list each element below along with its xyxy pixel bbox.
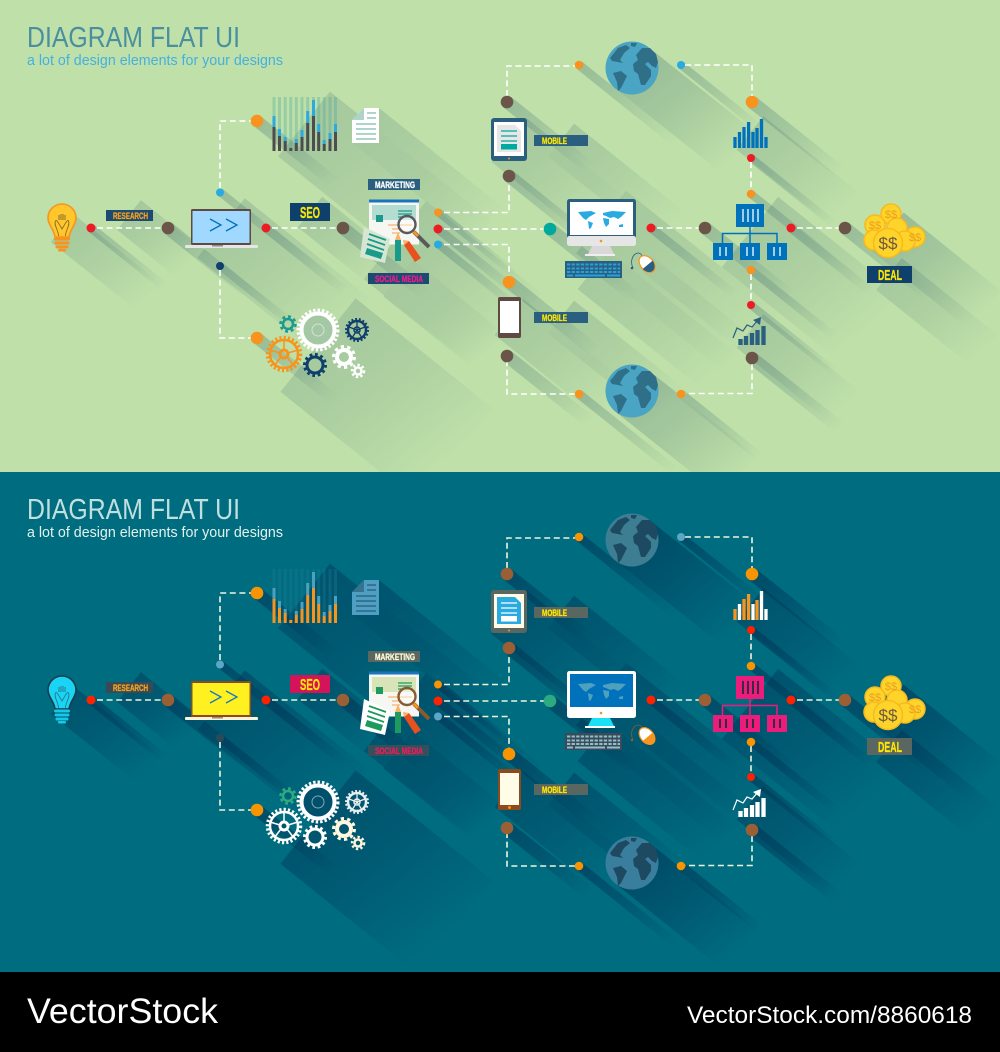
icon: globe top	[606, 42, 658, 94]
subtitle: a lot of design elements for your designs	[27, 52, 283, 69]
footer bar	[0, 972, 1000, 1052]
icon: tablet	[491, 118, 527, 161]
label: mobile bottom: MOBILE	[542, 785, 567, 795]
icon: gold coins	[864, 676, 925, 730]
subtitle: a lot of design elements for your designs	[27, 524, 283, 541]
icon: mouse	[631, 253, 658, 275]
label: marketing: MARKETING	[375, 180, 415, 190]
label: marketing	[368, 179, 420, 190]
icon: gold coins	[864, 204, 925, 258]
panel: light green diagram	[0, 0, 1000, 477]
icon: desktop monitor	[567, 671, 636, 728]
icon: document	[352, 580, 379, 615]
icon: org chart	[713, 676, 787, 732]
icon: globe bottom	[606, 836, 658, 890]
footer brand: VectorStock	[27, 992, 219, 1031]
bar chart	[274, 97, 336, 151]
label: research: RESEARCH	[113, 211, 148, 221]
label: deal	[867, 738, 912, 756]
label: marketing	[368, 651, 420, 662]
icon: gold coins: $$	[879, 234, 898, 253]
label: mobile top: MOBILE	[542, 136, 567, 146]
label: research: RESEARCH	[113, 683, 148, 693]
label: SEO: SEO	[300, 205, 320, 222]
icon: gold coins: $$	[869, 220, 881, 232]
icon: desktop monitor	[567, 199, 636, 256]
icon: gold coins: $$	[879, 706, 898, 725]
icon: mini bar chart	[735, 591, 766, 620]
label: social media: SOCIAL MEDIA	[375, 274, 423, 284]
label: SEO	[290, 675, 330, 694]
label: mobile top: MOBILE	[542, 608, 567, 618]
label: research	[106, 210, 153, 221]
icon: tablet	[491, 590, 527, 633]
icon: phone	[498, 297, 521, 338]
label: social media	[368, 273, 429, 284]
label: mobile top	[534, 135, 588, 146]
icon: gears	[268, 310, 368, 377]
long shadows	[62, 65, 985, 477]
label: mobile bottom	[534, 312, 588, 323]
title: DIAGRAM FLAT UI	[27, 494, 240, 526]
icon: gold coins: $$	[909, 232, 921, 244]
panel: teal diagram	[0, 472, 1000, 972]
long shadows	[62, 537, 985, 949]
icon: gold coins: $$	[869, 692, 881, 704]
label: SEO: SEO	[300, 677, 320, 694]
bar chart	[274, 569, 336, 623]
label: mobile top	[534, 607, 588, 618]
label: mobile bottom	[534, 784, 588, 795]
icon: marketing window and tools	[360, 200, 429, 263]
icon: globe bottom	[606, 364, 658, 418]
icon: mouse	[631, 725, 658, 747]
icon: document	[352, 108, 379, 143]
icon: marketing window and tools	[360, 672, 429, 735]
icon: keyboard	[565, 733, 622, 750]
icon: phone	[498, 769, 521, 810]
label: research	[106, 682, 153, 693]
label: deal	[867, 266, 912, 284]
label: mobile bottom: MOBILE	[542, 313, 567, 323]
icon: gold coins: $$	[885, 209, 897, 221]
icon: mini bar chart	[735, 119, 766, 148]
label: social media: SOCIAL MEDIA	[375, 746, 423, 756]
connector dots	[86, 533, 851, 870]
label: deal: DEAL	[878, 739, 902, 756]
icon: light bulb	[48, 204, 76, 252]
icon: growth chart	[733, 317, 764, 345]
icon: keyboard	[565, 261, 622, 278]
icon: growth chart	[733, 789, 764, 817]
connector dots	[86, 61, 851, 398]
icon: globe top	[606, 514, 658, 566]
icon: laptop	[185, 209, 258, 248]
icon: laptop	[185, 681, 258, 720]
icon: gold coins: $$	[909, 704, 921, 716]
dashed connectors	[97, 537, 839, 866]
footer url: VectorStock.com/8860618	[687, 1002, 972, 1029]
title: DIAGRAM FLAT UI	[27, 22, 240, 54]
icon: gold coins: $$	[885, 681, 897, 693]
icon: org chart	[713, 204, 787, 260]
label: marketing: MARKETING	[375, 652, 415, 662]
label: social media	[368, 745, 429, 756]
icon: light bulb	[48, 676, 76, 724]
icon: gears	[268, 782, 368, 849]
label: SEO	[290, 203, 330, 222]
label: deal: DEAL	[878, 267, 902, 284]
dashed connectors	[97, 65, 839, 394]
